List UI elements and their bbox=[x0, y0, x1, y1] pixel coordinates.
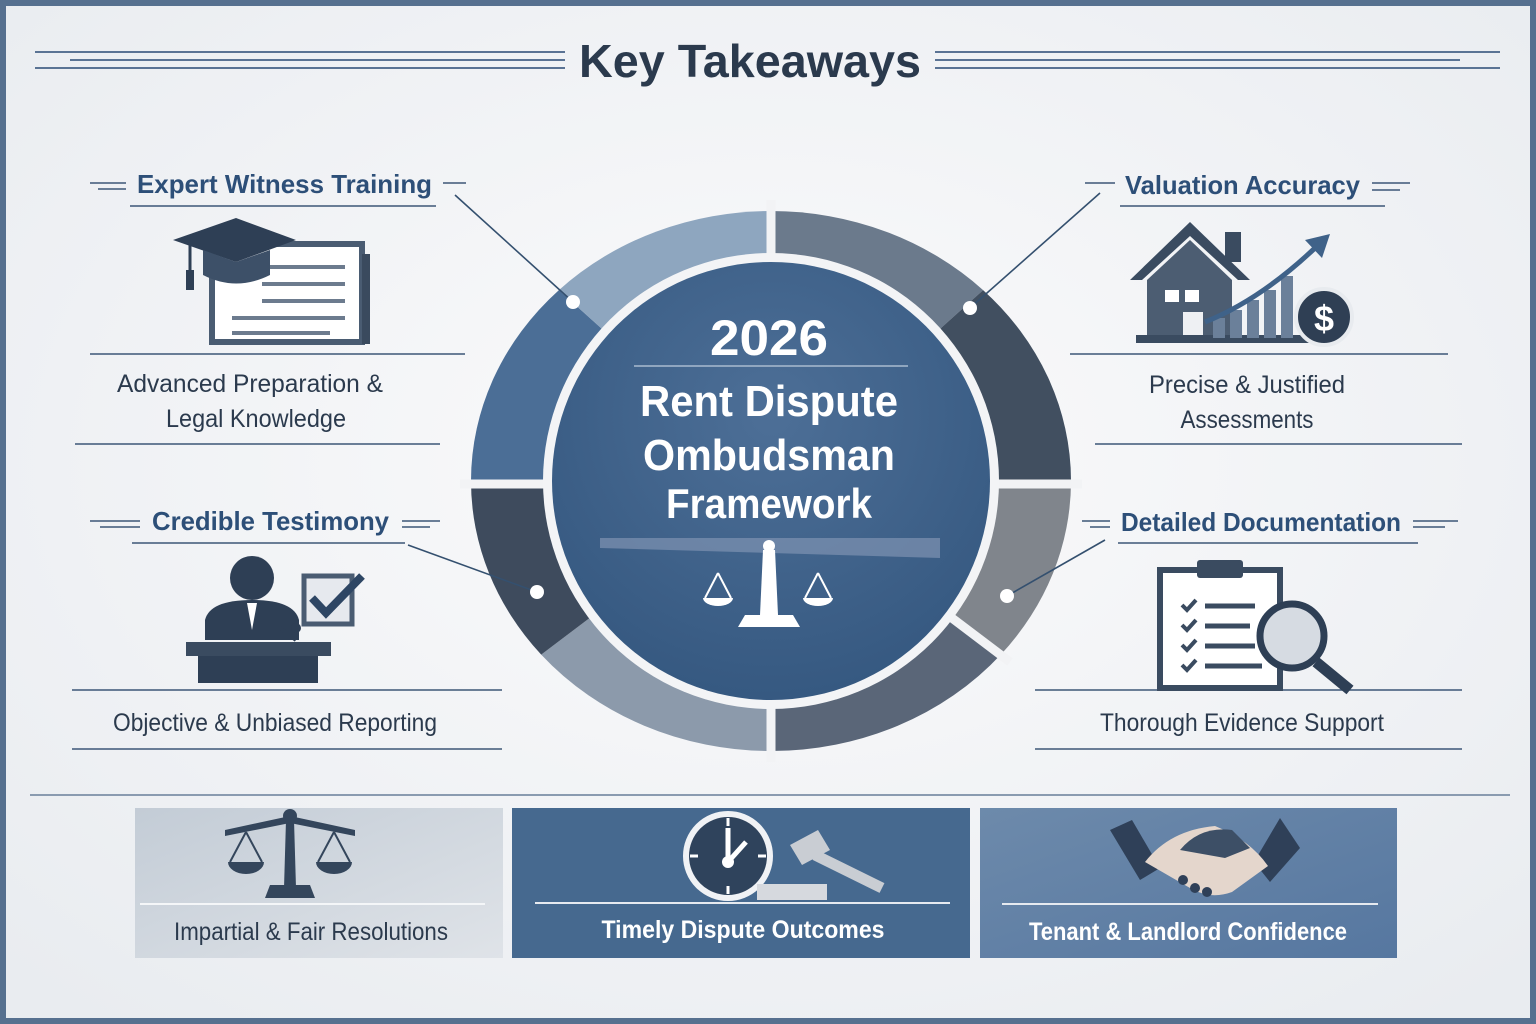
panel: expert witness training: Expert Witness Training bbox=[137, 169, 432, 199]
panel: detailed documentation: Thorough Evidence Support bbox=[1100, 709, 1384, 737]
panel: credible testimony bbox=[72, 506, 502, 749]
panel: expert witness training bbox=[75, 169, 466, 444]
panel: valuation accuracy: Precise & Justified bbox=[1149, 371, 1345, 399]
panel: detailed documentation bbox=[1035, 507, 1462, 749]
icon: center scales bbox=[600, 538, 940, 627]
center title text: 2026 bbox=[710, 310, 828, 366]
panel: detailed documentation: Detailed Documentation bbox=[1121, 507, 1401, 537]
center title text: Rent Dispute bbox=[640, 377, 898, 426]
panel: credible testimony: Credible Testimony bbox=[152, 506, 390, 536]
connectors bbox=[408, 193, 1105, 603]
icon: handshake bbox=[1110, 818, 1300, 897]
panel: valuation accuracy: Valuation Accuracy bbox=[1125, 170, 1361, 200]
icon: graduation cap and certificate bbox=[173, 218, 370, 344]
title: Key Takeaways bbox=[579, 35, 921, 87]
panel: tenant and landlord confidence: Tenant & Landlord Confidence bbox=[1029, 918, 1347, 946]
panel: expert witness training: Advanced Preparation & bbox=[117, 370, 383, 398]
icon: clipboard with magnifier bbox=[1160, 560, 1350, 690]
panel: timely dispute outcomes bbox=[512, 808, 970, 958]
panel: valuation accuracy bbox=[1070, 170, 1462, 444]
panel: impartial and fair resolutions: Impartial & Fair Resolutions bbox=[174, 918, 448, 946]
central ring diagram bbox=[460, 200, 1082, 762]
panel: tenant and landlord confidence bbox=[980, 808, 1397, 958]
panel: impartial and fair resolutions bbox=[135, 808, 503, 958]
panel: valuation accuracy: Assessments bbox=[1180, 406, 1314, 434]
center title text: Ombudsman bbox=[643, 431, 895, 480]
panel: credible testimony: Objective & Unbiased Reporting bbox=[113, 709, 437, 737]
panel: timely dispute outcomes: Timely Dispute Outcomes bbox=[602, 916, 884, 944]
icon: clock and gavel bbox=[686, 814, 882, 900]
icon: witness at podium bbox=[186, 556, 362, 683]
icon: house with growth chart: $ bbox=[1314, 298, 1334, 339]
center title text: Framework bbox=[666, 480, 873, 527]
panel: expert witness training: Legal Knowledge bbox=[166, 405, 346, 433]
icon: scales of justice bbox=[225, 809, 355, 898]
icon: house with growth chart bbox=[1130, 222, 1352, 345]
center title text bbox=[634, 310, 908, 527]
